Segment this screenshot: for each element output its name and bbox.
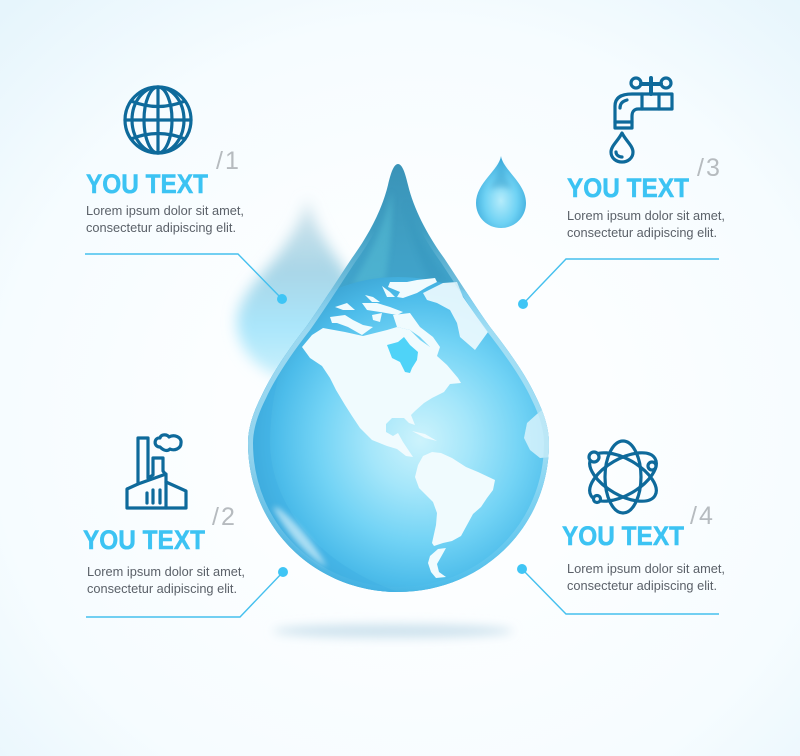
- heading 2: YOU TEXT: [83, 525, 205, 555]
- highlight streak lower left: [273, 507, 327, 567]
- heading 3: YOU TEXT: [567, 173, 689, 203]
- block 1: [85, 87, 287, 304]
- Africa: [524, 410, 549, 458]
- Greenland: [423, 282, 488, 350]
- connector 2: [86, 567, 288, 617]
- connector 4: [517, 564, 719, 614]
- rim band: [248, 239, 549, 577]
- continents: [302, 278, 552, 578]
- globe ocean: [248, 277, 549, 592]
- body 3: consectetur adipiscing elit.: [567, 226, 717, 240]
- icon: globe: [125, 87, 191, 153]
- block 3: [518, 78, 725, 309]
- number 1: /1: [216, 147, 241, 175]
- number 2: /2: [212, 503, 237, 531]
- body 3: Lorem ipsum dolor sit amet,: [567, 209, 725, 223]
- body 2: Lorem ipsum dolor sit amet,: [87, 565, 245, 579]
- body 1: consectetur adipiscing elit.: [86, 221, 236, 235]
- South America: [415, 452, 495, 546]
- main water drop with globe: [248, 164, 549, 592]
- body 1: Lorem ipsum dolor sit amet,: [86, 204, 244, 218]
- icon: factory: [127, 435, 186, 508]
- block 4: [517, 441, 725, 614]
- North America: [302, 327, 461, 457]
- connector 1: [85, 254, 287, 304]
- small water drop: [476, 156, 526, 228]
- streaks on drop top: [356, 204, 392, 282]
- heading 1: YOU TEXT: [86, 169, 208, 199]
- icon: faucet and drop: [611, 78, 672, 162]
- Hudson Bay: [387, 337, 418, 373]
- Caribbean islands: [412, 431, 437, 441]
- number 4: /4: [690, 502, 715, 530]
- ground shadow: [273, 624, 513, 638]
- icon: atom: [582, 441, 664, 513]
- inner crescent: [252, 374, 274, 420]
- heading 4: YOU TEXT: [562, 521, 684, 551]
- blurred background drop: [237, 198, 365, 382]
- Arctic islands: [388, 278, 437, 298]
- number 3: /3: [697, 154, 722, 182]
- body 4: Lorem ipsum dolor sit amet,: [567, 562, 725, 576]
- block 2: [83, 435, 288, 617]
- body 4: consectetur adipiscing elit.: [567, 579, 717, 593]
- connector 3: [518, 259, 719, 309]
- body 2: consectetur adipiscing elit.: [87, 582, 237, 596]
